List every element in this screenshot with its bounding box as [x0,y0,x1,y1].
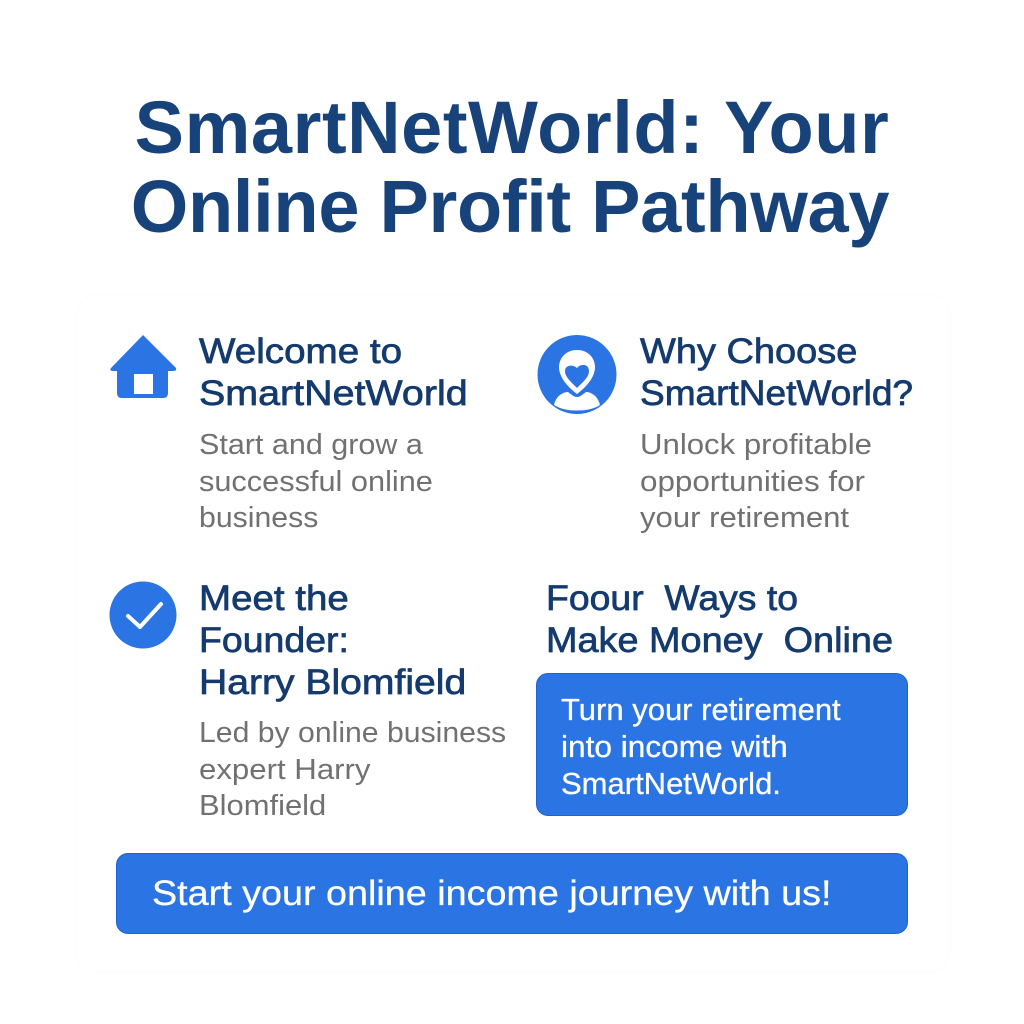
text: why choose description: Unlock profitable [640,429,872,461]
callout: retirement income: Turn your retirement [561,692,841,727]
heading: welcome: SmartNetWorld [199,374,468,413]
icon: house [110,335,176,398]
title: SmartNetWorld: Your [135,86,889,169]
text: why choose description [640,429,872,534]
heading: founder: Meet the [199,579,349,618]
heading: founder [199,579,466,702]
heading: four ways: Make Money Online [546,621,893,660]
call to action banner: Start your online income journey with us! [152,874,831,913]
callout: retirement income: into income with [561,729,788,764]
text: welcome description: successful online [199,466,433,498]
heading: welcome [198,332,468,413]
text: welcome description [199,429,433,534]
call to action banner [116,853,908,934]
heading: why choose: Why Choose [640,332,857,371]
heading: founder: Harry Blomfield [199,663,466,702]
text: founder description: Blomfield [199,790,326,822]
heading: why choose: SmartNetWorld? [640,374,913,413]
text: founder description: Led by online business [199,717,506,749]
callout: retirement income: SmartNetWorld. [561,766,781,801]
heading: four ways [546,579,893,660]
callout: retirement income [536,673,908,816]
panel: card background [78,296,948,970]
title [131,86,890,248]
icon: check mark [110,582,176,648]
title: Online Profit Pathway [131,165,889,248]
heading: welcome: Welcome to [199,332,402,371]
text: welcome description: Start and grow a [199,429,423,461]
text: why choose description: opportunities for [640,466,865,498]
heading: founder: Founder: [199,621,349,660]
text: founder description: expert Harry [199,754,371,786]
icon: person with heart [538,335,616,414]
text: welcome description: business [199,502,318,534]
text: founder description [199,717,506,822]
text: why choose description: your retirement [640,502,849,534]
heading: why choose [640,332,913,413]
heading: four ways: Foour Ways to [546,579,798,618]
